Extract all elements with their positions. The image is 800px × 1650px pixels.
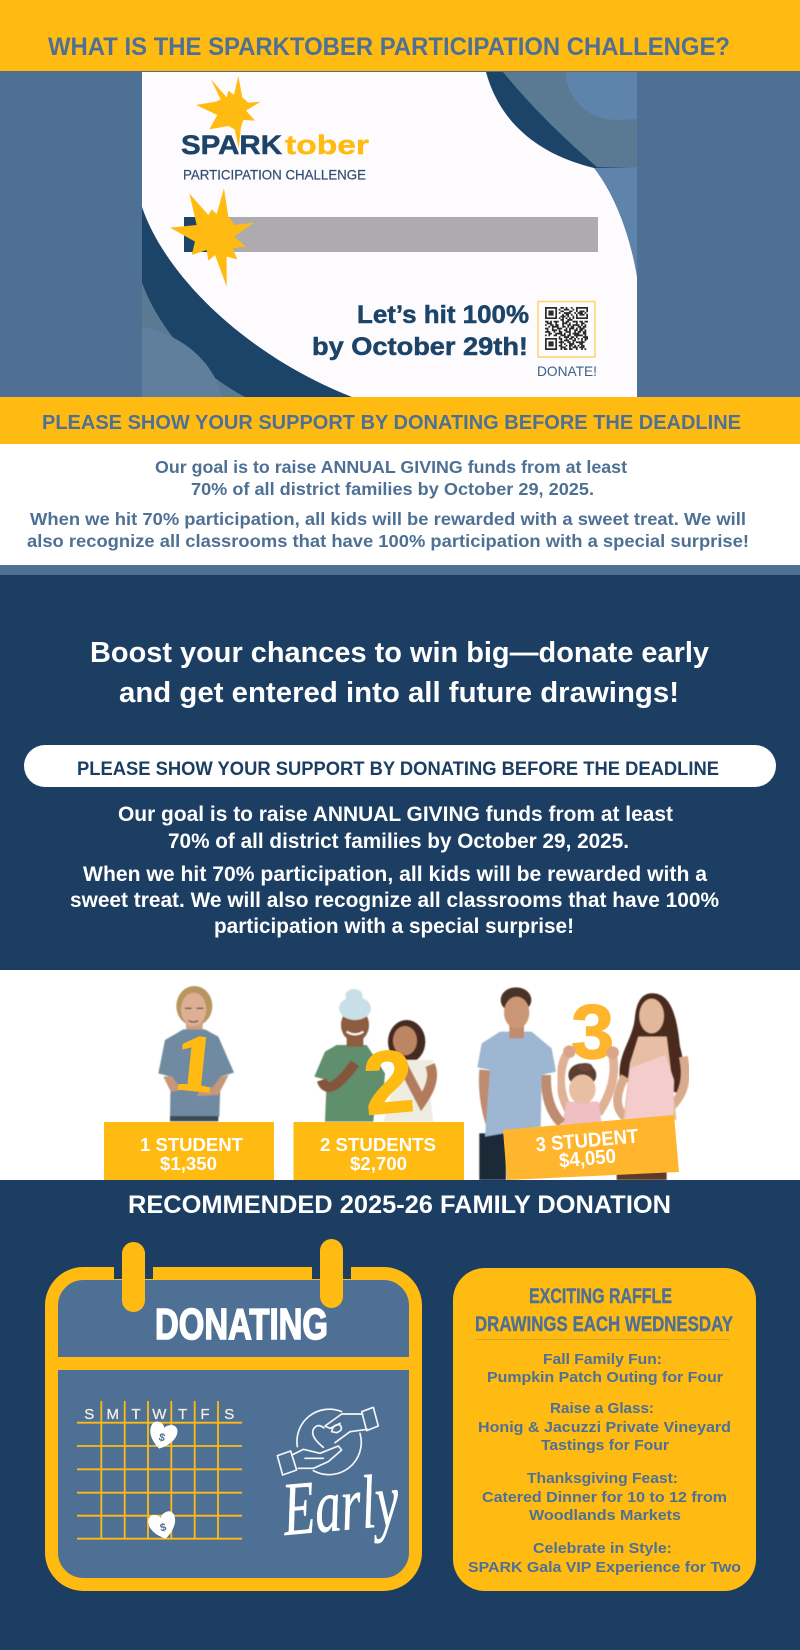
calendar grid: T [131,1406,141,1423]
calendar grid: F [200,1406,210,1423]
box: two students: $2,700 [350,1154,407,1174]
top banner [0,0,800,71]
pill: PLEASE SHOW YOUR SUPPORT BY DONATING BEFORE THE DEADLINE [77,758,719,780]
box: two students [294,1122,464,1180]
calendar grid: T [178,1406,187,1423]
logo wordmark [182,134,369,154]
raffle prize 1: Fall Family Fun: [543,1351,662,1368]
raffle prize 2: Honig & Jacuzzi Private Vineyard [478,1419,731,1436]
box: one student: 1 STUDENT [140,1135,243,1155]
icon: heart dollar upper: $ [157,1431,166,1445]
panel: goal text light: also recognize all classrooms that have 100% participation with a special surprise! [27,531,749,551]
number 3: 3 [571,989,614,1075]
photo: two students [314,989,433,1134]
calendar grid: S [224,1406,234,1423]
panel: goal text light: Our goal is to raise ANNUAL GIVING funds from at least [155,457,627,477]
raffle prize 3 [482,1470,727,1524]
heading: recommended donation: RECOMMENDED 2025-26 FAMILY DONATION [128,1191,671,1219]
logo wordmark: tober [285,130,370,160]
goal text dark [70,803,719,938]
boost heading: and get entered into all future drawings! [119,677,679,709]
panel: boost [0,575,800,970]
calendar grid: S [84,1406,94,1423]
box: two students: 2 STUDENTS [320,1135,436,1155]
boost heading [90,637,709,709]
number 1: 1 [171,1018,220,1110]
calendar ring left [122,1242,145,1312]
panel: raffle [453,1268,756,1591]
photo: three students [477,987,685,1180]
calendar ring right [320,1239,343,1308]
photo: one student [158,986,234,1121]
calendar grid: M [106,1406,119,1423]
calendar grid [77,1401,242,1539]
goal text dark: 70% of all district families by October 29, 2025. [168,830,629,853]
banner: deadline [0,397,800,444]
poster top right shapes [486,72,637,277]
QR code [538,302,595,357]
calendar [45,1239,422,1584]
script word: Early: Early [278,1458,402,1552]
panel: poster band [0,71,800,397]
calendar grid: W [152,1406,167,1423]
raffle heading [475,1285,733,1336]
call to action: by October 29th! [312,333,528,361]
logo wordmark: SPARK [181,130,283,160]
poster card [142,72,637,397]
raffle heading: EXCITING RAFFLE [529,1285,672,1308]
icon: heart dollar lower: $ [159,1521,168,1535]
star: logo [196,76,261,148]
raffle prize 4: Celebrate in Style: [533,1540,672,1557]
box: three students [503,1115,679,1180]
raffle prize 2: Raise a Glass: [550,1400,654,1417]
goal text dark: participation with a special surprise! [214,915,574,938]
pill [24,745,776,787]
raffle prize 1: Pumpkin Patch Outing for Four [487,1369,723,1386]
banner: deadline: PLEASE SHOW YOUR SUPPORT BY DONATING BEFORE THE DEADLINE [42,412,741,434]
goal text dark: When we hit 70% participation, all kids will be rewarded with a [83,863,707,886]
star: progress [170,188,254,287]
divider strip [0,565,800,575]
box: one student: $1,350 [160,1154,217,1174]
boost heading: Boost your chances to win big—donate early [90,637,709,669]
icon: giving hands [277,1407,378,1475]
little girl [561,1045,619,1125]
calendar heading: DONATING [155,1300,328,1349]
raffle prize 1 [487,1351,723,1386]
goal text dark: sweet treat. We will also recognize all classrooms that have 100% [70,889,719,912]
title: WHAT IS THE SPARKTOBER PARTICIPATION CHALLENGE? [48,33,730,61]
calendar body [52,1274,416,1584]
goal text dark: Our goal is to raise ANNUAL GIVING funds from at least [118,803,673,826]
progress bar [184,217,598,252]
raffle prize 3: Woodlands Markets [529,1507,681,1524]
box: three students: $4,050 [558,1146,617,1172]
panel: goal text light [0,444,800,565]
panel: goal text light: When we hit 70% participation, all kids will be rewarded with a sweet treat. We will [30,509,746,529]
number 2: 2 [360,1031,417,1134]
poster bottom left shapes [142,207,352,397]
icon: heart dollar lower [147,1510,179,1542]
call to action [312,301,529,361]
box: three students: 3 STUDENT [535,1126,639,1156]
raffle prize 2 [478,1400,731,1454]
older boy [477,987,562,1180]
raffle heading: DRAWINGS EACH WEDNESDAY [475,1313,733,1336]
panel: students [0,970,800,1180]
call to action: Let’s hit 100% [357,301,529,329]
raffle prize 4 [468,1540,741,1576]
big girl [617,993,685,1180]
donate label: DONATE! [537,363,597,379]
logo subtitle: PARTICIPATION CHALLENGE [183,166,366,182]
raffle prize 3: Catered Dinner for 10 to 12 from [482,1489,727,1506]
panel: goal text light: 70% of all district families by October 29, 2025. [191,479,594,499]
raffle prize 4: SPARK Gala VIP Experience for Two [468,1559,741,1576]
icon: heart dollar upper [146,1420,179,1452]
raffle prize 2: Tastings for Four [541,1437,669,1454]
box: one student [104,1122,274,1180]
raffle prize 3: Thanksgiving Feast: [527,1470,678,1487]
